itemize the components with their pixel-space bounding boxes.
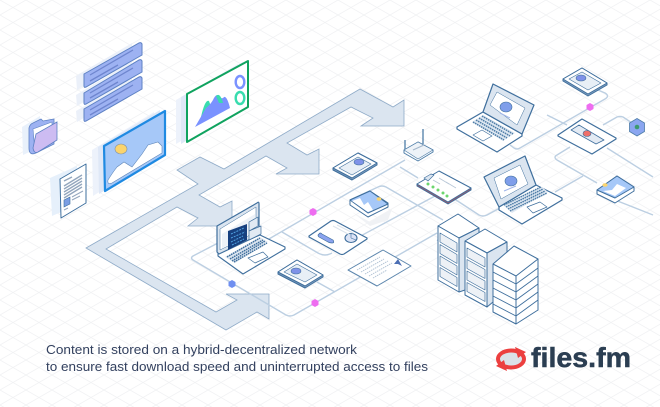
image tile: right xyxy=(597,176,634,203)
files.fm logo: files.fm xyxy=(531,342,631,373)
stacked list panels xyxy=(76,43,142,122)
laptop: upper cloud xyxy=(457,84,534,152)
pink node cube xyxy=(310,208,316,216)
server rack 1 xyxy=(438,214,479,292)
tablet: lower centre xyxy=(278,260,323,288)
blue node cube xyxy=(228,280,236,288)
connector lines xyxy=(192,90,653,316)
tablet: top right xyxy=(563,68,607,96)
laptop: lower cloud xyxy=(484,156,562,224)
device card with toggle xyxy=(558,119,616,154)
pink node cube xyxy=(312,299,318,307)
hex node xyxy=(630,118,644,136)
router xyxy=(404,129,433,161)
clipboard xyxy=(417,171,471,204)
folder icon xyxy=(22,116,57,155)
server rack 2 xyxy=(465,229,507,307)
document icon xyxy=(50,164,86,218)
UI card with pill and donut xyxy=(309,220,367,254)
image card xyxy=(92,110,165,196)
arrow network xyxy=(86,89,404,330)
caption text xyxy=(46,342,429,374)
chart card xyxy=(176,61,248,144)
laptop: code editor xyxy=(217,202,285,274)
pink node cube xyxy=(586,103,594,111)
caption text: Content is stored on a hybrid-decentralized network xyxy=(46,342,358,357)
document tile xyxy=(348,250,411,286)
server rack 3 xyxy=(493,246,538,324)
tablet: top centre xyxy=(333,153,377,180)
image tile: centre xyxy=(350,191,392,226)
caption text: to ensure fast download speed and uninterrupted access to files xyxy=(46,359,429,374)
